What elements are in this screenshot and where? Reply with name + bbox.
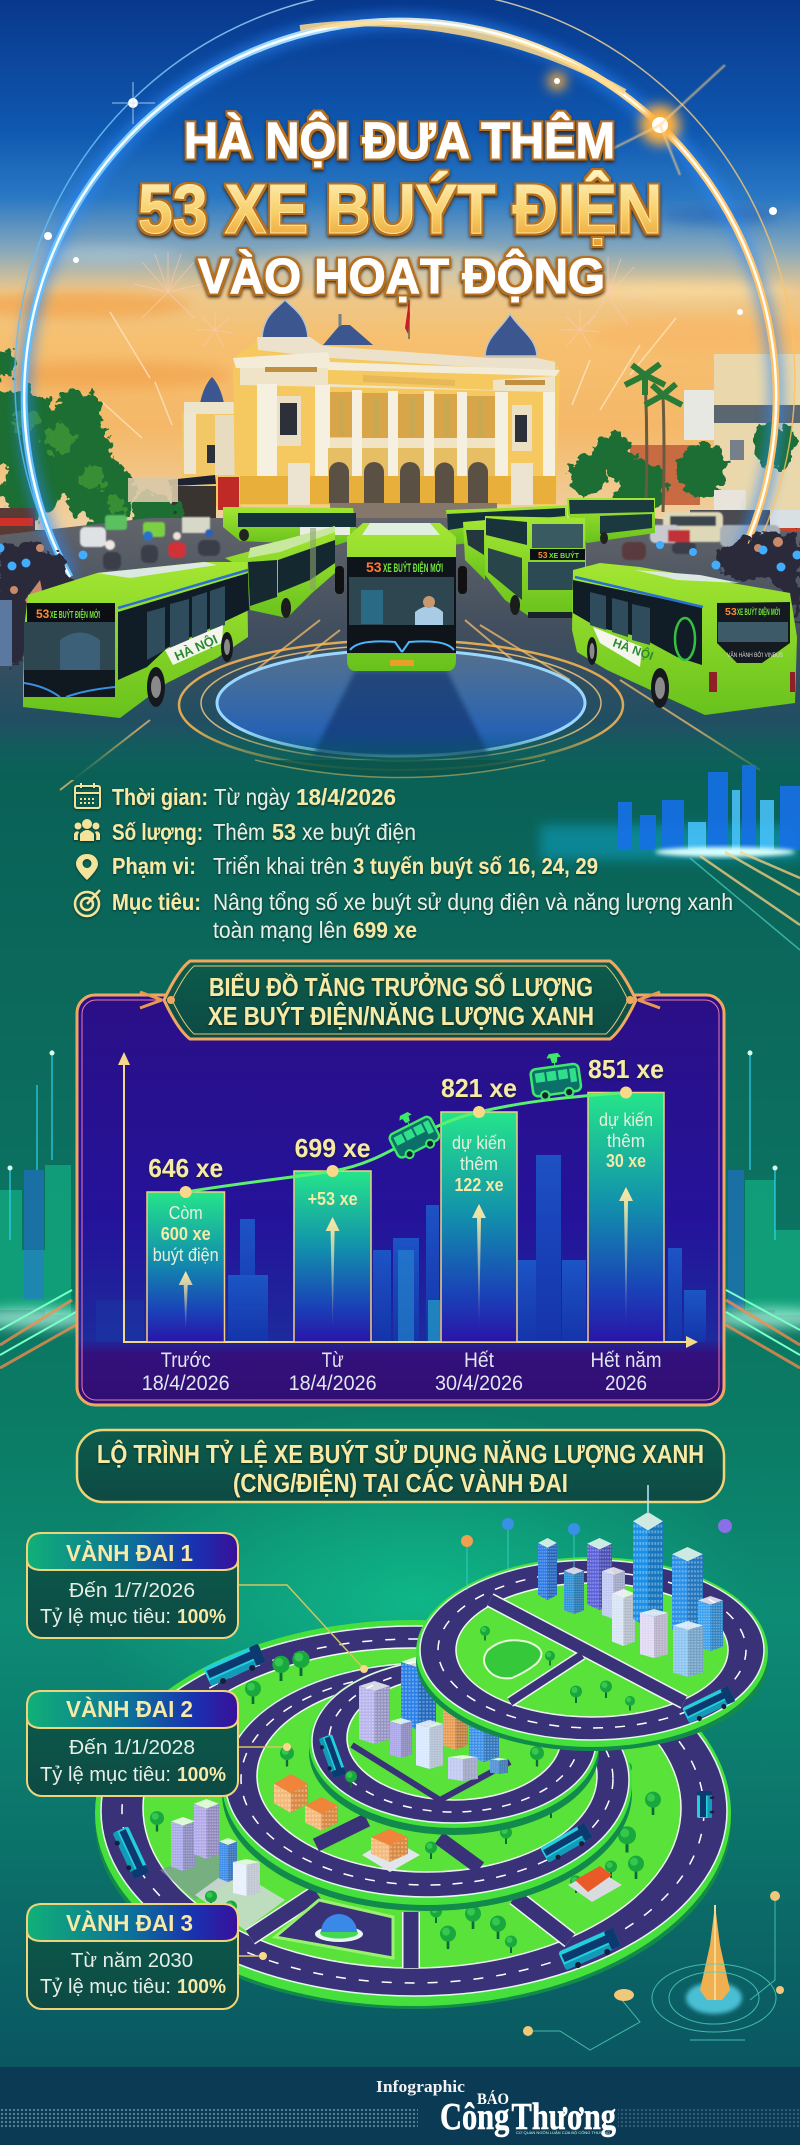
street xyxy=(0,518,800,770)
bar: hết 30/4/2026: thêm xyxy=(460,1154,498,1174)
connector 2 xyxy=(238,1743,291,1751)
bar: hết năm 2026 xyxy=(588,1092,664,1342)
opera house xyxy=(168,300,560,523)
bus: center xyxy=(335,523,467,671)
bays xyxy=(327,392,495,441)
card: vành đai 1: Tỷ lệ mục tiêu: xyxy=(40,1606,171,1628)
bus: middle right xyxy=(463,516,587,618)
park trees xyxy=(480,1626,635,1710)
bar: từ 18/4/2026: +53 xe xyxy=(308,1189,358,1209)
bus: middle right: 53 xyxy=(538,550,548,560)
bus: center: XE BUÝT ĐIỆN MỚI xyxy=(383,560,443,575)
card: vành đai 1: 100% xyxy=(177,1606,226,1628)
row: phạm vi: Phạm vi: xyxy=(112,853,196,879)
central towers xyxy=(345,1656,544,1788)
bar: trước 18/4/2026: 600 xe xyxy=(161,1224,211,1244)
flag xyxy=(408,300,410,339)
roadmap heading banner xyxy=(77,1430,724,1502)
title xyxy=(138,111,662,304)
gold arc under hero xyxy=(255,760,545,778)
card: vành đai 2: Tỷ lệ mục tiêu: xyxy=(40,1764,171,1786)
glowing ring xyxy=(15,0,795,577)
connector 3 xyxy=(238,1952,267,1960)
bar: hết 30/4/2026 xyxy=(441,1112,517,1342)
kiosk and banner xyxy=(168,475,239,522)
row: số lượng: 53 xyxy=(272,819,296,845)
columns xyxy=(257,384,555,476)
x axis labels: 18/4/2026 xyxy=(289,1372,377,1395)
data points xyxy=(180,1086,632,1198)
ring 1 island xyxy=(309,1656,599,1835)
x axis labels: 30/4/2026 xyxy=(435,1372,523,1395)
neon city right xyxy=(710,1050,800,1368)
icon: people xyxy=(74,819,100,841)
info rows xyxy=(74,783,733,943)
row: thời gian: 18/4/2026 xyxy=(296,784,396,810)
card: vành đai 1: VÀNH ĐAI 1 xyxy=(66,1539,193,1566)
right buildings and trees xyxy=(568,354,800,538)
x axis labels: 2026 xyxy=(605,1372,647,1395)
chart heading banner xyxy=(140,961,660,1039)
bar: trước 18/4/2026: Còm xyxy=(169,1203,203,1223)
firework streaks xyxy=(102,312,676,438)
row: số lượng: Số lượng: xyxy=(112,819,203,845)
row: thời gian xyxy=(75,783,396,810)
ring buses xyxy=(110,1644,736,1973)
bar: hết 30/4/2026: dự kiến xyxy=(452,1133,506,1153)
cross roads xyxy=(250,1893,570,1968)
skyline xyxy=(538,1485,723,1677)
row: thời gian: Thời gian: xyxy=(112,784,208,810)
icon: bus with plug xyxy=(528,1051,582,1101)
card: vành đai 1 xyxy=(27,1533,368,1673)
sparkles xyxy=(44,65,777,315)
left wing xyxy=(182,402,255,507)
bus: back left xyxy=(223,507,358,545)
logo: CƠ QUAN NGÔN LUẬN CỦA BỘ CÔNG THƯƠNG xyxy=(516,2130,610,2135)
x axis labels: Trước xyxy=(161,1349,211,1372)
city silhouette in chart xyxy=(96,1155,706,1342)
value labels: 646 xe xyxy=(148,1153,223,1183)
top island roads xyxy=(490,1600,684,1702)
crowd right xyxy=(656,530,800,635)
roadmap heading banner: LỘ TRÌNH TỶ LỆ XE BUÝT SỬ DỤNG NĂNG LƯỢNG XANH xyxy=(97,1438,704,1469)
value labels: 821 xe xyxy=(441,1073,517,1103)
card: vành đai 2: 100% xyxy=(177,1764,226,1786)
fireworks xyxy=(134,252,644,348)
glowing platform xyxy=(179,640,623,770)
x axis labels: Từ xyxy=(322,1349,344,1372)
title line 3: VÀO HOẠT ĐỘNG xyxy=(198,249,605,304)
roadmap heading banner: (CNG/ĐIỆN) TẠI CÁC VÀNH ĐAI xyxy=(233,1468,568,1498)
houses xyxy=(274,1774,420,1872)
shop xyxy=(568,1866,622,1902)
row: mục tiêu xyxy=(75,889,733,943)
footer label: Infographic xyxy=(376,2077,465,2096)
row: phạm vi xyxy=(76,853,598,880)
growth line xyxy=(186,1092,626,1192)
axes xyxy=(118,1052,698,1348)
card: vành đai 3 xyxy=(27,1904,267,2009)
bus: large right xyxy=(572,563,797,715)
bar: hết năm 2026: dự kiến xyxy=(599,1110,653,1130)
bus: large right: HÀ NỘI xyxy=(611,635,656,663)
map glow xyxy=(80,1410,760,1790)
windows xyxy=(277,396,532,451)
map: ring roads xyxy=(95,1485,768,2009)
card: vành đai 2 xyxy=(27,1691,291,1796)
row: số lượng xyxy=(74,819,416,845)
traffic right xyxy=(622,512,780,560)
arches xyxy=(328,448,495,476)
x axis labels: 18/4/2026 xyxy=(142,1372,230,1395)
x axis labels: Hết năm xyxy=(590,1349,662,1372)
icon: map pin xyxy=(76,854,98,880)
logo: BÁO xyxy=(477,2089,509,2108)
base xyxy=(240,476,556,504)
bar: trước 18/4/2026 xyxy=(147,1192,224,1342)
sky xyxy=(0,0,800,530)
card: vành đai 3: Từ năm 2030 xyxy=(71,1950,193,1972)
dome plaza xyxy=(275,1900,393,1958)
connector 1 xyxy=(238,1585,368,1673)
row: số lượng: Thêm xyxy=(213,819,265,845)
balustrade xyxy=(257,337,555,372)
row: mục tiêu: 699 xe xyxy=(353,917,417,943)
main block xyxy=(233,337,560,505)
hero fade into background xyxy=(0,730,800,780)
card: vành đai 2: Đến 1/1/2028 xyxy=(69,1737,195,1759)
ring 2 trees xyxy=(280,1746,557,1859)
bus: large right: VẬN HÀNH BỞI VINBUS xyxy=(727,650,784,659)
trees xyxy=(150,1651,661,1953)
icon: target xyxy=(75,890,100,916)
race track park xyxy=(484,1640,541,1678)
x axis labels xyxy=(142,1349,662,1395)
bar: hết 30/4/2026: 122 xe xyxy=(454,1175,504,1195)
chart heading banner: BIỂU ĐỒ TĂNG TRƯỞNG SỐ LƯỢNG xyxy=(209,971,593,1002)
bar: hết năm 2026: thêm xyxy=(607,1131,645,1151)
bar: hết năm 2026: 30 xe xyxy=(606,1151,646,1171)
hero photo illustration xyxy=(0,0,800,790)
row: thời gian: Từ ngày xyxy=(214,784,290,810)
icon: calendar xyxy=(75,783,100,808)
row: mục tiêu: Mục tiêu: xyxy=(112,889,201,915)
lower park buildings xyxy=(160,1799,285,1930)
light rays on road xyxy=(60,620,760,790)
value labels xyxy=(148,1054,664,1183)
x axis labels: Hết xyxy=(464,1349,494,1372)
top island xyxy=(416,1485,768,1751)
value labels: 699 xe xyxy=(295,1133,371,1163)
row: phạm vi: Triển khai trên xyxy=(213,853,347,879)
bus: large left xyxy=(23,562,249,718)
bus: large right: 53 xyxy=(725,606,737,618)
crowd left xyxy=(0,540,88,668)
bus: back right pair xyxy=(446,498,655,545)
bar: trước 18/4/2026: buýt điện xyxy=(153,1245,219,1265)
bus: middle left xyxy=(225,526,335,618)
neon city top right xyxy=(540,765,800,950)
row: mục tiêu: toàn mạng lên xyxy=(213,917,347,943)
left trees xyxy=(0,351,179,539)
row: phạm vi: 3 tuyến buýt số 16, 24, 29 xyxy=(353,853,598,879)
landmark tower with circuit xyxy=(523,1891,784,2050)
footer xyxy=(0,2067,800,2145)
icon: bus climbing xyxy=(383,1104,443,1163)
domes xyxy=(262,300,308,338)
ring 3 island xyxy=(95,1620,731,2009)
title line 2: 53 XE BUÝT ĐIỆN xyxy=(138,169,662,248)
card: vành đai 3: VÀNH ĐAI 3 xyxy=(66,1909,193,1936)
neon city left xyxy=(0,1050,95,1368)
page background xyxy=(0,740,800,2145)
bus: middle right: XE BUÝT xyxy=(549,551,579,560)
bus: large left: 53 xyxy=(36,607,50,621)
dome xyxy=(315,1914,363,1942)
value labels: 851 xe xyxy=(588,1054,664,1084)
card: vành đai 2: VÀNH ĐAI 2 xyxy=(66,1695,193,1722)
sunset clouds xyxy=(0,206,800,389)
tech pins xyxy=(461,1518,732,1590)
bus: large left: HÀ NỘI xyxy=(172,632,220,664)
upper frieze xyxy=(240,368,555,392)
row: số lượng: xe buýt điện xyxy=(302,819,416,845)
card: vành đai 3: 100% xyxy=(177,1976,226,1998)
panel: growth chart xyxy=(77,995,724,1405)
bus: large left: XE BUÝT ĐIỆN MỚI xyxy=(50,608,100,621)
cornice xyxy=(233,352,560,376)
card: vành đai 3: Tỷ lệ mục tiêu: xyxy=(40,1976,171,1998)
row: mục tiêu: Nâng tổng số xe buýt sử dụng điện và năng lượng xanh xyxy=(213,889,733,915)
bar: từ 18/4/2026 xyxy=(294,1171,371,1342)
steps xyxy=(330,503,497,523)
title line 1: HÀ NỘI ĐƯA THÊM xyxy=(184,111,615,169)
inscription xyxy=(363,375,455,386)
card: vành đai 1: Đến 1/7/2026 xyxy=(69,1580,195,1602)
bus: center: 53 xyxy=(366,559,382,575)
logo: Công Thương xyxy=(440,2096,616,2138)
traffic left xyxy=(80,515,220,570)
ring 2 island xyxy=(222,1661,632,1911)
chart heading banner: XE BUÝT ĐIỆN/NĂNG LƯỢNG XANH xyxy=(208,1001,594,1031)
